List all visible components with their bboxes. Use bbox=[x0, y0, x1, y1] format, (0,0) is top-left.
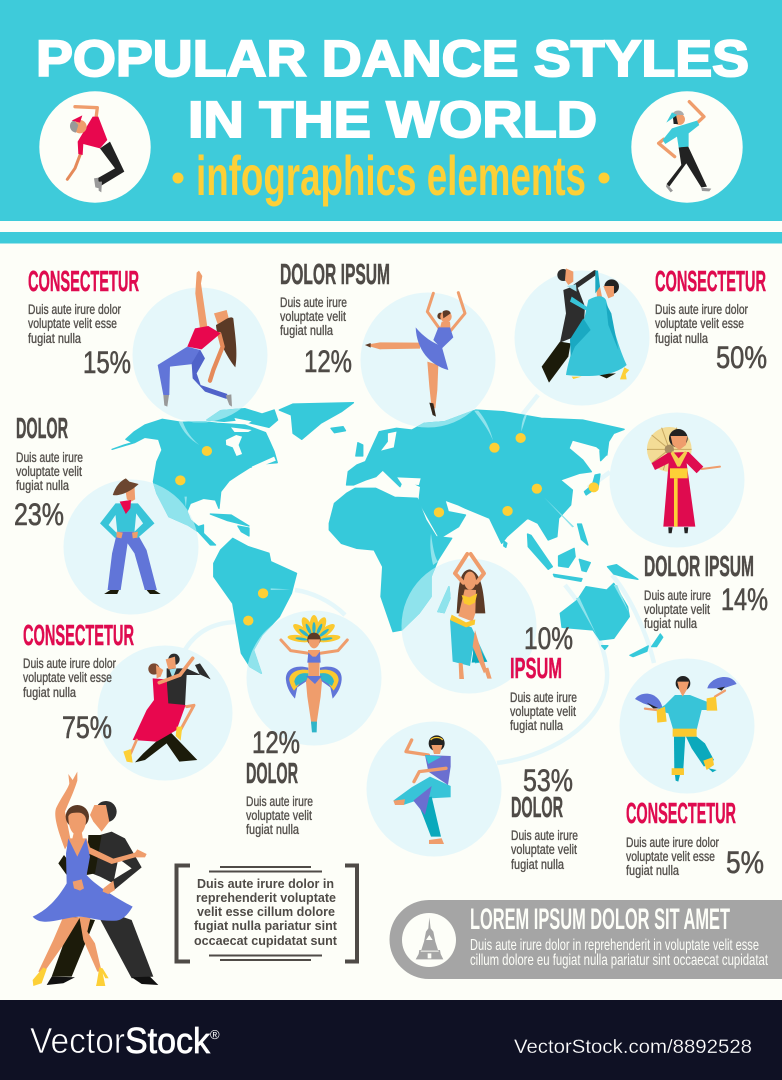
panel: belly dance, center right bbox=[450, 554, 577, 733]
footer bar bbox=[0, 1000, 782, 1080]
percentage: 75% bbox=[62, 709, 112, 745]
text block: voluptate velit bbox=[280, 309, 346, 324]
text block: Duis aute irure dolor bbox=[23, 656, 116, 671]
logo: Vector bbox=[30, 1020, 125, 1061]
text block bbox=[510, 690, 577, 733]
panel: tango, left bbox=[23, 620, 211, 763]
callout text bbox=[194, 876, 338, 948]
percentage: 10% bbox=[524, 620, 573, 656]
heading: CONSECTETUR bbox=[23, 620, 134, 652]
percentage: 50% bbox=[716, 339, 767, 375]
panel: cowboy, left: DOLOR bbox=[16, 413, 68, 445]
panel: grey banner bbox=[390, 900, 782, 979]
icon: belly dancer bbox=[450, 554, 492, 679]
bracket left bbox=[176, 866, 190, 962]
text block: voluptate velit esse bbox=[626, 849, 715, 864]
panel: geisha, right bbox=[644, 427, 768, 631]
text block: voluptate velit esse bbox=[28, 316, 117, 331]
illustration: large dancing couple bbox=[33, 772, 158, 986]
panel: ballet, top center bbox=[280, 259, 465, 417]
text block bbox=[23, 656, 116, 700]
title: IN THE WORLD bbox=[188, 91, 597, 148]
callout text: Duis aute irure dolor in bbox=[197, 876, 334, 891]
dancer circle backgrounds bbox=[64, 270, 754, 856]
text block: voluptate velit bbox=[246, 808, 312, 823]
logo: ® bbox=[210, 1027, 220, 1042]
text block bbox=[655, 302, 748, 346]
panel: jazz, top left bbox=[28, 266, 236, 407]
panel: indian dance, bottom center bbox=[393, 735, 578, 872]
text block: Duis aute irure bbox=[510, 690, 577, 705]
percentage: 5% bbox=[726, 844, 764, 880]
text block: fugiat nulla bbox=[644, 616, 697, 631]
text block: voluptate velit esse bbox=[655, 316, 744, 331]
bracket right bbox=[345, 866, 357, 962]
heading: IPSUM bbox=[510, 653, 562, 685]
percentage: 12% bbox=[252, 724, 300, 760]
text block: Duis aute irure bbox=[511, 828, 578, 843]
text block bbox=[280, 295, 347, 338]
text block: fugiat nulla bbox=[246, 822, 299, 837]
callout text: fugiat nulla pariatur sint bbox=[194, 918, 338, 933]
panel: samba, center: DOLOR bbox=[246, 758, 298, 790]
icon: temple bbox=[402, 913, 456, 967]
pins bbox=[175, 433, 599, 626]
banner text bbox=[470, 937, 768, 969]
text block: voluptate velit esse bbox=[23, 670, 112, 685]
text block: Duis aute irure bbox=[246, 794, 313, 809]
icon: geisha with parasol bbox=[647, 427, 720, 533]
text block: fugiat nulla bbox=[28, 331, 81, 346]
text block: fugiat nulla bbox=[510, 718, 563, 733]
logo: Stock bbox=[125, 1020, 211, 1061]
world map bbox=[112, 403, 663, 673]
icon: hip hop dancer right bbox=[631, 91, 743, 203]
percentage: 23% bbox=[14, 496, 64, 532]
panel: fan dance, bottom right bbox=[626, 676, 764, 880]
map seas bbox=[226, 418, 421, 485]
text block: fugiat nulla bbox=[16, 478, 69, 493]
text block: voluptate velit bbox=[511, 842, 577, 857]
icon: fan dancer bbox=[635, 676, 737, 782]
panel: samba, center bbox=[246, 615, 347, 837]
icon: samba dancer bbox=[281, 615, 347, 732]
text block: fugiat nulla bbox=[511, 857, 564, 872]
text block bbox=[16, 450, 83, 493]
callout text: reprehenderit voluptate bbox=[196, 890, 336, 905]
subtitle bbox=[172, 144, 610, 207]
percentage: 15% bbox=[83, 344, 131, 380]
icon: ballroom couple bbox=[542, 268, 629, 383]
map overlap tint bbox=[153, 408, 472, 674]
header banner bbox=[0, 0, 782, 244]
percentage: 53% bbox=[523, 762, 573, 798]
text block: Duis aute irure dolor bbox=[655, 302, 748, 317]
callout text: occaecat cupidatat sunt bbox=[194, 933, 338, 948]
text block bbox=[644, 588, 711, 631]
text block bbox=[511, 828, 578, 872]
icon: ballerina bbox=[365, 293, 465, 417]
text block: voluptate velit bbox=[644, 602, 710, 617]
icon: tango couple bbox=[123, 654, 211, 763]
text block bbox=[28, 302, 121, 346]
panel: cowboy, left bbox=[14, 413, 161, 594]
text block: Duis aute irure dolor bbox=[28, 302, 121, 317]
text block: voluptate velit bbox=[510, 704, 576, 719]
text block bbox=[246, 794, 313, 837]
text block: fugiat nulla bbox=[23, 685, 76, 700]
text block: Duis aute irure bbox=[644, 588, 711, 603]
title bbox=[36, 30, 749, 148]
title: POPULAR DANCE STYLES bbox=[36, 30, 749, 87]
icon: jazz dancer bbox=[158, 271, 236, 407]
icon: indian dancer bbox=[393, 735, 451, 844]
image id: VectorStock.com/8892528 bbox=[514, 1036, 752, 1058]
percentage: 12% bbox=[304, 343, 352, 379]
text block: fugiat nulla bbox=[626, 863, 679, 878]
heading: CONSECTETUR bbox=[28, 266, 139, 298]
panel: ballroom, top right bbox=[542, 266, 767, 383]
subtitle: infographics elements bbox=[196, 144, 586, 207]
icon: cowboy bbox=[100, 478, 161, 594]
text block: voluptate velit bbox=[16, 464, 82, 479]
callout: bracketed text bbox=[176, 866, 357, 962]
icon: hip hop dancer left bbox=[39, 91, 151, 203]
text block: fugiat nulla bbox=[655, 331, 708, 346]
logo bbox=[30, 1020, 220, 1061]
map connector streaks bbox=[179, 411, 629, 635]
callout text: velit esse cillum dolore bbox=[197, 904, 335, 919]
text block bbox=[626, 835, 719, 878]
text block: Duis aute irure bbox=[280, 295, 347, 310]
text block: Duis aute irure bbox=[16, 450, 83, 465]
text block: fugiat nulla bbox=[280, 323, 333, 338]
connector arcs bbox=[182, 395, 654, 763]
text block: Duis aute irure dolor bbox=[626, 835, 719, 850]
heading: DOLOR IPSUM bbox=[280, 259, 390, 291]
panel: indian dance, bottom center: DOLOR bbox=[511, 792, 563, 824]
